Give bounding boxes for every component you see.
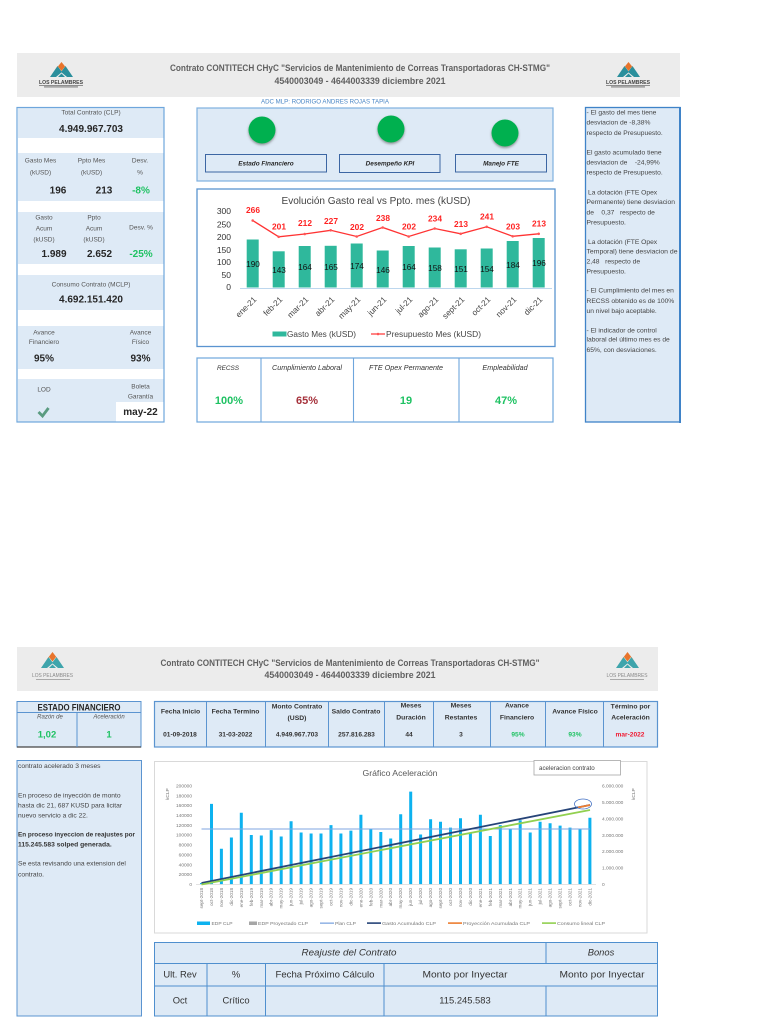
gasto mes block: Gasto Mes [25, 158, 57, 164]
gasto value labels: 154 [480, 265, 494, 274]
x axis month labels: jul-2021 [538, 888, 543, 905]
panel: comments on deviation: Permanente) tiene desviacion [586, 199, 675, 206]
saldo contrato [332, 708, 380, 738]
panel: comments on deviation: respecto de Presupuesto. [586, 170, 663, 176]
x axis month labels: oct-2021 [568, 888, 572, 906]
x axis month labels: ene-21 [234, 295, 259, 319]
callout ellipse [574, 799, 592, 809]
fecha termino [212, 708, 259, 738]
annotation box: aceleracion contrato [539, 765, 595, 772]
avance fisico: 93% [568, 732, 582, 738]
gasto value labels: 164 [298, 263, 312, 272]
panel: comments on deviation [586, 107, 681, 423]
panel: comments on deviation: - El indicador de control [586, 328, 657, 334]
x axis month labels: dic-2019 [348, 888, 353, 906]
x axis month labels: nov-2020 [458, 888, 463, 907]
x axis month labels: abr-2019 [269, 888, 274, 906]
chart legend [272, 330, 481, 339]
avance block: Avance [130, 330, 152, 336]
row values: 115.245.583 [439, 994, 491, 1006]
row values [173, 994, 491, 1006]
header title: 4540003049 - 4644003339 diciembre 2021 [274, 76, 446, 86]
column headers: % [232, 968, 240, 980]
x axis month labels: sept-2020 [438, 888, 443, 908]
chart legend: EDP CLP [212, 921, 232, 927]
gasto value labels: 174 [350, 262, 364, 271]
x axis month labels: mar-2021 [498, 888, 503, 908]
gasto acumulado block [33, 214, 153, 260]
panel: comments on deviation: un nivel bajo aceptable. [586, 308, 657, 315]
panel: contract notes: nuevo servicio a dic 22. [18, 812, 88, 820]
left axis labels: 80000 [179, 843, 192, 849]
x axis month labels: oct-2020 [448, 888, 453, 906]
x axis month labels: may-2019 [279, 888, 284, 908]
gasto acumulado block: (kUSD) [33, 236, 55, 244]
presupuesto value labels: 234 [428, 214, 442, 224]
row values: Crítico [222, 994, 250, 1006]
header title [160, 658, 540, 680]
x axis month labels: jun-2019 [289, 888, 294, 907]
panel: comments on deviation: desviacion de -24,99% [586, 160, 660, 166]
monto contrato [272, 704, 322, 738]
bars: gasto mes [247, 238, 545, 288]
chart title: Gráfico Aceleración [362, 768, 438, 778]
panel: contract notes: En proceso inyeccion de reajustes por [18, 832, 135, 838]
x axis month labels: nov-21 [494, 295, 519, 319]
presupuesto value labels: 212 [298, 218, 312, 228]
x axis month labels: sept-2018 [199, 888, 204, 908]
x axis month labels: may-2021 [518, 888, 523, 908]
panel: comments on deviation: de 0,37 respecto de [586, 210, 655, 216]
left axis labels: 60000 [179, 852, 192, 858]
LOD and boleta garantia: may-22 [123, 407, 158, 418]
x axis month labels: sept-2021 [558, 888, 563, 908]
x axis month labels: ene-2021 [478, 888, 483, 907]
icon: Los Pelambres logo left [32, 652, 73, 680]
panel: contract summary [17, 108, 164, 422]
x axis month labels: ago-21 [416, 295, 441, 319]
annotation box [534, 760, 620, 775]
gasto acumulado block: Desv. % [129, 224, 153, 232]
column headers: Ult. Rev [163, 968, 197, 980]
termino por aceleracion: Término por [611, 704, 651, 710]
monto contrato: Monto Contrato [272, 704, 322, 710]
panel: estado financiero [17, 702, 141, 747]
x axis month labels: sept-2019 [318, 888, 324, 908]
panel: acceleration chart [154, 760, 647, 933]
meses restantes [445, 702, 477, 738]
LOD and boleta garantia: Garantía [128, 394, 154, 400]
y axis labels: 50 [222, 270, 231, 280]
avance financiero: Financiero [500, 714, 534, 722]
fecha inicio: 01-09-2018 [163, 732, 197, 738]
consumo contrato: 4.692.151.420 [59, 294, 123, 306]
panel: comments on deviation: laboral del último mes es de [586, 336, 670, 344]
presupuesto value labels: 266 [246, 205, 260, 215]
avance fisico: Avance Físico [552, 708, 598, 716]
x axis month labels: mar-2019 [259, 888, 264, 908]
gasto value labels: 143 [272, 266, 286, 275]
icon: Los Pelambres logo left [39, 62, 83, 88]
header title: Contrato CONTITECH CHyC "Servicios de Mantenimiento de Correas Transportadoras CH-STMG" [170, 63, 550, 73]
fecha inicio: Fecha Inicio [161, 708, 200, 716]
monto contrato: 4.949.967.703 [276, 732, 318, 738]
presupuesto value labels: 202 [402, 222, 416, 232]
left axis labels: 120000 [176, 823, 192, 829]
avance financiero [500, 702, 534, 738]
avance block: Financiero [29, 339, 60, 346]
gasto value labels: 190 [246, 260, 260, 269]
consumo contrato [52, 282, 130, 306]
presupuesto value labels: 202 [350, 222, 364, 232]
panel: comments on deviation: El gasto acumulado tiene [586, 150, 662, 156]
metric: aceleracion [92, 714, 125, 740]
KPI: RECSS: 100% [215, 395, 243, 407]
right axis labels: 6.000.000 [602, 784, 624, 790]
panel: comments on deviation: 2,48 respecto de [586, 258, 640, 266]
termino por aceleracion: mar-2022 [616, 732, 645, 738]
left axis labels: 140000 [176, 813, 192, 819]
right axis labels: 4.000.000 [602, 816, 624, 822]
meses duracion: Meses [401, 702, 422, 710]
x axis month labels: ago-2021 [548, 888, 553, 907]
avance block [29, 330, 152, 364]
saldo contrato: 257.816.283 [338, 732, 375, 738]
icon: check mark [38, 408, 48, 416]
metric: razon de: 1,02 [38, 730, 56, 740]
heading: bonos: Bonos [588, 946, 615, 958]
panel: contract notes: 115.245.583 solped generada. [18, 842, 112, 848]
fecha termino: Fecha Termino [212, 708, 259, 716]
x axis month labels: mar-2020 [378, 888, 383, 908]
left axis labels: 20000 [179, 872, 192, 878]
left axis labels: 200000 [176, 784, 192, 790]
meses duracion: 44 [405, 732, 413, 738]
presupuesto value labels: 201 [272, 222, 286, 232]
LOD and boleta garantia: Boleta [131, 384, 150, 390]
presupuesto value labels: 213 [454, 219, 468, 229]
x axis month labels: jun-21 [365, 295, 389, 318]
x axis month labels: dic-21 [522, 295, 545, 317]
presupuesto value labels: 227 [324, 216, 338, 226]
gasto mes block: (kUSD) [81, 170, 102, 176]
x axis month labels: abr-2020 [388, 888, 393, 906]
bars: EDP CLP [202, 792, 590, 884]
panel: contract notes: contrato. [18, 872, 44, 878]
panel: comments on deviation: Presupuesto. [586, 220, 626, 226]
x axis month labels: dic-2021 [587, 888, 592, 906]
meses restantes: Restantes [445, 714, 477, 722]
gasto acumulado block: -25% [129, 249, 153, 260]
metric: razon de: Razón de [37, 714, 64, 720]
KPI: empleabilidad [482, 363, 529, 407]
LOD and boleta garantia: LOD [37, 386, 51, 394]
icon: Los Pelambres logo right [606, 652, 648, 680]
gasto value labels [246, 259, 546, 275]
fecha termino: 31-03-2022 [219, 732, 253, 738]
x axis month labels: abr-21 [313, 295, 337, 318]
y axis labels: 250 [217, 220, 231, 230]
KPI: FTE opex permanente: 19 [400, 395, 412, 407]
total contrato: Total Contrato (CLP) [61, 110, 121, 116]
panel: contract notes [17, 760, 142, 1016]
gasto value labels: 164 [402, 263, 416, 272]
gasto mes block: 196 [50, 186, 67, 196]
saldo contrato: Saldo Contrato [332, 708, 380, 716]
gasto acumulado block: 1.989 [41, 249, 67, 260]
x axis month labels: jun-2020 [408, 888, 413, 907]
column headers: Fecha Próximo Cálculo [276, 968, 374, 980]
panel: contract notes: Se esta revisando una extension del [18, 860, 126, 868]
header title [170, 63, 550, 86]
panel: comments on deviation: desviacion de -8,38% [586, 120, 650, 126]
chart legend: Consumo lineal CLP [557, 921, 605, 927]
left axis labels: 180000 [176, 793, 192, 799]
panel: comments on deviation: respecto de Presupuesto. [586, 130, 663, 137]
gasto mes block: % [137, 170, 143, 176]
x axis month labels: dic-2020 [468, 888, 473, 906]
x axis month labels: feb-2019 [249, 888, 254, 906]
x axis month labels: ago-2020 [428, 888, 433, 907]
presupuesto value labels: 241 [480, 212, 494, 222]
panel: estado financiero: ESTADO FINANCIERO [38, 702, 120, 712]
panel: comments on deviation: Temporal) tiene desviacion de [586, 248, 678, 256]
header title: Contrato CONTITECH CHyC "Servicios de Mantenimiento de Correas Transportadoras CH-STMG" [160, 658, 540, 668]
right axis labels: 2.000.000 [602, 849, 624, 855]
meses duracion: Duración [396, 714, 426, 722]
panel: comments on deviation: La dotación (FTE Opex [588, 190, 658, 196]
avance financiero: 95% [511, 732, 525, 738]
metric: razon de [37, 714, 64, 740]
gasto acumulado block: Acum [86, 226, 102, 232]
avance block: Avance [33, 330, 55, 336]
gasto value labels: 146 [376, 266, 390, 275]
y axis labels: 300 [217, 206, 231, 216]
panel: contract notes: contrato acelerado 3 meses [18, 763, 101, 770]
consumo contrato: Consumo Contrato (MCLP) [52, 282, 130, 288]
KPI: cumplimiento laboral: 65% [296, 395, 318, 407]
presupuesto value labels: 238 [376, 213, 390, 223]
x axis month labels: jul-2019 [299, 888, 304, 905]
panel: comments on deviation: - El Cumplimiento del mes en [586, 288, 674, 294]
status: manejo FTE [456, 120, 546, 172]
gasto mes block: 213 [96, 186, 113, 196]
y axis labels: 200 [217, 232, 231, 242]
x axis month labels: nov-2019 [338, 888, 343, 907]
line: plan CLP [202, 828, 590, 830]
gasto acumulado block: Gasto [35, 214, 53, 222]
x axis month labels: oct-2018 [209, 888, 214, 906]
x axis month labels: feb-21 [262, 295, 285, 318]
KPI: RECSS [215, 365, 243, 407]
KPI: empleabilidad: Empleabilidad [482, 363, 529, 372]
panel: KPI table [197, 358, 553, 422]
icon: Los Pelambres logo right: LOS PELAMBRES [606, 673, 648, 679]
icon: Los Pelambres logo left: LOS PELAMBRES [39, 80, 83, 86]
termino por aceleracion: Aceleración [611, 714, 650, 722]
status: estado financiero: Estado Financiero [238, 160, 294, 168]
x axis month labels: ene-2019 [239, 888, 244, 907]
y axis labels: 100 [217, 257, 231, 267]
line: consumo lineal CLP [202, 810, 590, 884]
gasto mes block: Desv. [132, 158, 148, 164]
left axis labels [165, 784, 192, 888]
avance financiero: Avance [505, 702, 529, 710]
gasto value labels: 184 [506, 261, 520, 270]
KPI: FTE opex permanente: FTE Opex Permanente [369, 363, 443, 372]
x axis month labels: jun-2021 [528, 888, 533, 907]
chart legend: EDP Proyectado CLP [258, 921, 308, 927]
panel: contract readjustment table [154, 942, 658, 1016]
gasto value labels: 151 [454, 265, 468, 274]
y axis labels: 150 [217, 245, 231, 255]
chart legend: Plan CLP [335, 921, 356, 927]
x axis month labels: abr-2021 [508, 888, 513, 906]
gasto mes block [25, 158, 150, 196]
column headers [163, 968, 644, 980]
x axis month labels: ene-2020 [358, 888, 363, 907]
x axis month labels: ago-2019 [309, 888, 314, 907]
termino por aceleracion [611, 704, 651, 738]
gasto mes block: -8% [132, 186, 150, 196]
x axis month labels: may-21 [337, 295, 363, 321]
metric: aceleracion: Aceleración [92, 714, 125, 720]
gasto value labels: 196 [532, 259, 546, 268]
avance block: 95% [34, 354, 54, 364]
KPI: FTE opex permanente [369, 363, 443, 407]
x axis month labels: jul-2020 [418, 888, 423, 905]
gasto acumulado block: Ppto [87, 214, 101, 222]
line: gasto acumulado CLP [202, 805, 590, 883]
right axis labels [602, 784, 637, 888]
gasto acumulado block: (kUSD) [83, 236, 105, 244]
right axis labels: 1.000.000 [602, 866, 624, 872]
chart legend: Presupuesto Mes (kUSD) [386, 330, 481, 339]
chart legend: Proyección Acumulada CLP [463, 921, 530, 927]
left axis labels: 40000 [179, 862, 192, 868]
icon: Los Pelambres logo right [606, 62, 650, 88]
line: presupuesto mes [251, 219, 540, 238]
panel: status indicators [197, 108, 553, 181]
panel: contract notes: hasta dic 21, 687 KUSD para licitar [18, 802, 123, 810]
x axis month labels: oct-21 [470, 295, 493, 318]
KPI: cumplimiento laboral: Cumplimiento Laboral [272, 363, 342, 372]
panel: comments on deviation: Presupuesto. [586, 268, 626, 276]
gasto mes block: Ppto Mes [78, 158, 106, 164]
y axis labels [217, 206, 231, 292]
gasto acumulado block: Acum [36, 226, 52, 232]
LOD and boleta garantia [37, 384, 158, 418]
avance fisico [552, 708, 598, 738]
column headers: Monto por Inyectar [422, 968, 508, 980]
chart legend: Gasto Acumulado CLP [382, 921, 436, 927]
panel: contract data table [154, 702, 658, 747]
left axis labels: kCLP [165, 788, 171, 800]
monto contrato: (USD) [288, 715, 306, 722]
column headers: Monto por Inyectar [560, 968, 644, 980]
y axis labels: 0 [226, 282, 231, 292]
status: manejo FTE: Manejo FTE [483, 160, 520, 168]
x axis month labels: sept-21 [441, 295, 467, 321]
KPI: RECSS: RECSS [217, 365, 240, 372]
total contrato: 4.949.967.703 [59, 124, 123, 135]
left axis labels: 100000 [176, 833, 192, 839]
avance block: 93% [130, 354, 151, 364]
header band: second page [17, 647, 658, 691]
meses restantes: Meses [451, 702, 472, 710]
x axis month labels: dic-2018 [229, 888, 234, 906]
x axis month labels: may-2020 [398, 888, 403, 908]
meses restantes: 3 [459, 732, 463, 738]
KPI: empleabilidad: 47% [495, 395, 517, 407]
chart legend [197, 921, 605, 927]
x axis month labels: oct-2019 [328, 888, 334, 906]
presupuesto value labels: 213 [532, 218, 546, 228]
line: proyeccion acumulada CLP [578, 805, 590, 808]
x axis month labels: jul-21 [393, 295, 415, 316]
left axis labels: 0 [189, 882, 192, 888]
status: desempeno KPI: Desempeño KPI [366, 160, 415, 168]
panel: contract notes: En proceso de inyección de monto [18, 792, 121, 800]
left axis labels: 160000 [176, 803, 192, 809]
right axis labels: kCLP [631, 788, 637, 800]
gasto mes block: (kUSD) [30, 170, 51, 176]
header band: top page [17, 53, 680, 97]
chart title: Evolución Gasto real vs Ppto. mes (kUSD) [282, 196, 470, 207]
total contrato [59, 110, 123, 135]
right axis labels: 3.000.000 [602, 833, 624, 839]
panel: comments on deviation: - El gasto del mes tiene [586, 110, 657, 116]
icon: Los Pelambres logo left: LOS PELAMBRES [32, 673, 73, 679]
status: estado financiero [206, 116, 326, 172]
presupuesto value labels: 203 [506, 222, 520, 232]
KPI: cumplimiento laboral [272, 363, 342, 407]
gasto value labels: 158 [428, 264, 442, 273]
header title: 4540003049 - 4644003339 diciembre 2021 [264, 670, 436, 680]
icon: Los Pelambres logo right: LOS PELAMBRES [606, 80, 650, 86]
x axis month labels [199, 888, 592, 908]
x axis month labels: feb-2020 [368, 888, 373, 906]
meses duracion [396, 702, 426, 738]
x axis month labels: nov-2021 [578, 888, 582, 907]
metric: aceleracion: 1 [106, 730, 112, 740]
right axis labels: 5.000.000 [602, 800, 624, 806]
panel: comments on deviation: 65%, con desviaciones. [586, 347, 657, 354]
fecha inicio [161, 708, 200, 738]
panel: monthly spend chart [197, 189, 555, 346]
x axis month labels: feb-2021 [488, 888, 493, 906]
status: desempeno KPI [340, 116, 440, 172]
gasto value labels: 165 [324, 263, 338, 272]
gasto acumulado block: 2.652 [87, 249, 112, 260]
x axis month labels: nov-2018 [219, 888, 224, 907]
presupuesto value labels [246, 205, 546, 232]
panel: comments on deviation: La dotación (FTE Opex [588, 239, 658, 246]
chart legend: Gasto Mes (kUSD) [287, 330, 356, 339]
administrator line: ADC MLP: RODRIGO ANDRES ROJAS TAPIA [261, 98, 390, 106]
x axis month labels: mar-21 [286, 295, 311, 320]
avance block: Físico [132, 339, 150, 346]
heading: reajuste del contrato: Reajuste del Contrato [302, 946, 396, 958]
row values: Oct [173, 994, 188, 1006]
panel: comments on deviation: RECSS obtenido es de 100% [586, 298, 674, 305]
x axis month labels [234, 295, 545, 321]
right axis labels: 0 [602, 882, 605, 888]
